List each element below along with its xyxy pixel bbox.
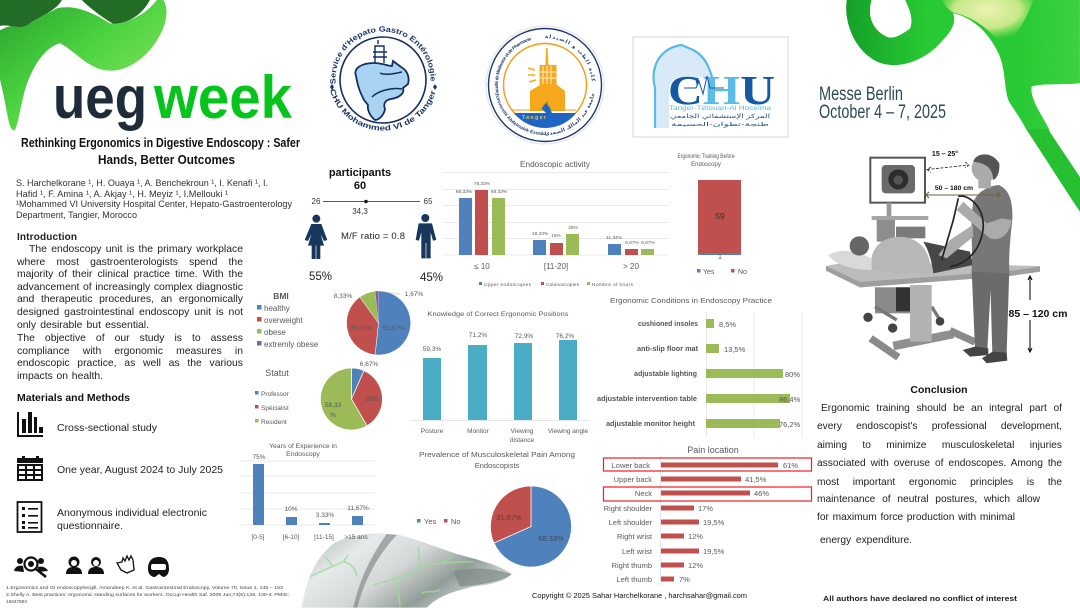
logo: CHU Tanger-Tetouan-Al Hoceima: CHU <box>668 67 775 113</box>
chart: pain location: Right wrist <box>617 532 653 541</box>
chart: BMI pie: BMI <box>273 291 289 301</box>
footer: copyright: Copyright © 2025 Sahar Harchelkorane , harchsahar@gmail.com <box>532 591 747 600</box>
chart: years of experience in endoscopy: 10% <box>284 506 298 513</box>
chart: pain location: Neck <box>635 489 652 498</box>
chart: ergonomic conditions in endoscopy practice: adjustable intervention table <box>597 394 697 403</box>
chart: ergonomic training before endoscopy <box>678 154 747 276</box>
references: 1.Ergonomics and GI endoscopyhergill, Amandeep K. et al. Gastrointestinal Endoscopy, Volume 70, Issue 1, 145 – 153 <box>6 585 283 590</box>
text: questionnaire: Anonymous individual electronic <box>57 507 207 519</box>
chart: BMI pie: 1,67% <box>405 291 423 298</box>
text block: introduction: and therapeutic procedures, an ergonomically <box>17 294 243 305</box>
chart: ergonomic conditions in endoscopy practice: 86,4% <box>779 395 801 404</box>
text block: conclusion: maintenance of neutral postures, which allow <box>817 494 1040 505</box>
decoration: green organ top right <box>846 0 1080 212</box>
participants summary <box>305 167 443 284</box>
chart: endoscopic activity: 11,34% <box>606 235 623 241</box>
chart: statut pie: 6,67% <box>360 361 378 368</box>
logo: ueg week: week <box>153 64 293 131</box>
authors and affiliation: Hafid ¹, F. Amina ¹, A. Akjay ¹, H. Meyiz ¹, I.Mellouki ¹ <box>16 189 228 200</box>
text: questionnaire: questionnaire. <box>57 520 123 532</box>
chart: statut pie: Statut <box>265 368 289 378</box>
text: venue and date: Messe Berlin <box>819 84 903 105</box>
heading: conclusion: Conclusion <box>910 384 968 396</box>
text block: conclusion: associated with overuse of endoscopes. Among the <box>817 458 1062 469</box>
logo: faculte de medecine tanger <box>485 25 605 145</box>
chart: endoscopic activity: Endoscopic activity <box>520 160 590 169</box>
chart: pain location: Lower back <box>612 461 650 470</box>
chart: ergonomic training before endoscopy: Yes <box>703 269 715 276</box>
authors and affiliation: Department, Tangier, Morocco <box>16 210 137 221</box>
decoration: liver illustration <box>302 533 512 608</box>
chart: knowledge of correct ergonomic positions: Knowledge of Correct Ergonomic Positions <box>428 311 569 318</box>
chart: statut pie: 35% <box>365 396 379 403</box>
title <box>21 136 300 167</box>
highlight: lower back <box>604 458 812 471</box>
references: 2.Shelly A. Best practices: ergonomic standing surfaces for workers. Occup Health Saf. 2005 Jun;74(6):128, 130-4. PMID: <box>6 592 289 597</box>
text block: introduction: only desirable but essential. <box>17 320 149 331</box>
heading: introduction: Introduction <box>17 232 77 243</box>
chart: years of experience in endoscopy: Endoscopy <box>286 451 320 458</box>
chart: knowledge of correct ergonomic positions: distance <box>510 437 534 444</box>
chart: ergonomic conditions in endoscopy practice: 8,5% <box>719 320 736 329</box>
text: venue and date <box>819 84 946 123</box>
chart: endoscopic activity <box>443 160 668 288</box>
participants summary: M/F ratio = 0.8 <box>341 231 405 242</box>
chart: years of experience in endoscopy: [11-15] <box>314 534 334 541</box>
chart: ergonomic training before endoscopy: No <box>738 269 747 276</box>
chart: years of experience in endoscopy: [0-5] <box>251 534 265 541</box>
logo: service hepato gastro enterologie: CHU Mohammed VI de Tanger <box>330 89 435 131</box>
text block: introduction: The endoscopy unit is the primary workplace <box>29 244 243 255</box>
logo: faculte de medecine tanger: كلية الطب و الصيدلة <box>545 34 596 81</box>
chart: pain location: Left wrist <box>622 547 653 556</box>
text: questionnaire <box>57 507 207 532</box>
chart: ergonomic conditions in endoscopy practice: anti-slip floor mat <box>637 344 699 353</box>
chart: pain location: 61% <box>783 461 798 470</box>
logo: ueg week <box>53 64 293 131</box>
chart: ergonomic conditions in endoscopy practice: adjustable lighting <box>634 369 697 378</box>
chart: endoscopic activity: [11-20] <box>544 262 568 271</box>
text block: introduction: majority of their clinical practice time. With the <box>17 269 243 280</box>
logo: CHU Tanger-Tetouan-Al Hoceima: Tanger-Tétouan-Al Hoceima <box>669 106 772 112</box>
references <box>6 585 289 604</box>
chart: endoscopic activity: 68,33% <box>456 189 473 195</box>
chart: endoscopic activity: 78,33% <box>474 181 491 187</box>
chart: endoscopic activity: ≤ 10 <box>474 262 490 271</box>
illustration: endoscopist ergonomic setup: 15 – 25° <box>932 150 958 158</box>
chart: endoscopic activity: Nombre of hours <box>592 282 634 288</box>
chart: prevalence of musculoskeletal pain: Prevalence of Musculoskeletal Pain Among <box>419 450 575 459</box>
icon: calendar <box>17 456 43 481</box>
chart: BMI pie: healthy <box>264 304 290 313</box>
chart: knowledge of correct ergonomic positions: Viewing angle <box>548 428 589 435</box>
text block: introduction: impacts on health. <box>17 371 103 382</box>
references: 16047983 <box>6 599 27 604</box>
chart: knowledge of correct ergonomic positions: 72,9% <box>515 333 533 340</box>
chart: years of experience in endoscopy <box>240 443 375 541</box>
text block: introduction: endoscopic practice, as well as the various <box>17 358 243 369</box>
logo: service hepato gastro enterologie: Service d'Hepato Gastro Entérologie <box>330 26 436 84</box>
endoscope <box>942 196 983 267</box>
text block: conclusion: aiming to minimize musculoskeletal injuries <box>817 440 1062 451</box>
doctor <box>938 154 1012 363</box>
arrow: viewing distance <box>926 192 1000 198</box>
chart: endoscopic activity: Colonoscopies <box>546 282 580 288</box>
icon row: people, doctors, glove, goggles <box>14 556 169 577</box>
text block: conclusion: for maximum force production with minimal <box>817 512 1015 523</box>
decoration: green organ top left <box>0 0 167 130</box>
heading: materials and methods: Materials and Methods <box>17 392 130 404</box>
chart: statut pie: Spécialist <box>261 405 289 412</box>
chart: BMI pie: obese <box>264 328 286 337</box>
text block: introduction: where most gastroenterologists spend the <box>17 257 243 268</box>
text block: introduction: The objective of our study is to assess <box>17 333 243 344</box>
chart: BMI pie: extremly obese <box>264 340 319 349</box>
chart: endoscopic activity: Upper endoscopies <box>484 282 532 288</box>
chart: endoscopic activity: 25% <box>568 225 579 231</box>
chart: prevalence of musculoskeletal pain: Endoscopists <box>475 461 520 470</box>
logo: service hepato gastro enterologie <box>330 26 437 131</box>
chart: prevalence of musculoskeletal pain <box>417 450 575 567</box>
text block: conclusion: most important ergonomic principles is the <box>817 477 1062 488</box>
chart: pain location: 17% <box>698 504 713 513</box>
illustration: endoscopist ergonomic setup: 50 – 180 cm <box>935 185 973 192</box>
text block: conclusion: every endoscopist's professional development, <box>817 421 1062 432</box>
chart: pain location <box>604 445 812 586</box>
chart: knowledge of correct ergonomic positions: Monitor <box>467 428 490 435</box>
monitor <box>870 158 925 217</box>
participants summary: 65 <box>424 197 433 206</box>
participants summary: 26 <box>312 197 321 206</box>
icon: male figure <box>416 214 436 258</box>
chart: endoscopic activity: 68,33% <box>491 189 508 195</box>
chart: pain location: 46% <box>754 489 769 498</box>
chart: pain location: 19,5% <box>703 547 725 556</box>
chart: knowledge of correct ergonomic positions: Viewing <box>511 428 534 435</box>
chart: knowledge of correct ergonomic positions: 76,2% <box>556 333 574 340</box>
authors and affiliation: ¹Mohammed VI University Hospital Center, Hepato-Gastroenterology <box>16 199 292 210</box>
chart: ergonomic conditions in endoscopy practice: 13,5% <box>724 345 746 354</box>
chart: prevalence of musculoskeletal pain: Yes <box>424 517 436 526</box>
chart: ergonomic training before endoscopy: 59 <box>715 211 725 221</box>
chart: statut pie: 58,33 <box>325 402 342 409</box>
logo: CHU Tanger-Tetouan-Al Hoceima: المركز الإستشفائي الجامعي <box>670 113 771 120</box>
logo: faculte de medecine tanger: Tanger <box>522 115 546 121</box>
logo: faculte de medecine tanger: Université Abdelmalek Essaâdi <box>496 96 546 135</box>
text: venue and date: October 4 – 7, 2025 <box>819 102 946 123</box>
chart: BMI pie: 51,67% <box>383 325 405 332</box>
chart: pain location: 12% <box>688 561 703 570</box>
chart: pain location: Upper back <box>614 475 652 484</box>
chart: endoscopic activity: > 20 <box>623 262 639 271</box>
chart: pain location: 7% <box>679 575 690 584</box>
logo: faculte de medecine tanger: Faculté de Médecine et de Pharmacie <box>494 38 531 96</box>
chart: ergonomic training before endoscopy: 1 <box>718 254 722 261</box>
chart: years of experience in endoscopy: 3.33% <box>316 512 334 519</box>
chart: endoscopic activity: 18,33% <box>532 231 549 237</box>
table <box>826 262 1040 357</box>
logo: faculte de medecine tanger: جامعة عبد المالك السعدي <box>546 94 595 136</box>
arrow: viewing angle <box>927 162 969 172</box>
highlight: neck <box>604 487 812 501</box>
authors and affiliation: S. Harchelkorane ¹, H. Ouaya ¹, A. Benchekroun ¹, I. Kenafi ¹, I. <box>16 178 268 189</box>
chart: BMI pie: 8,33% <box>334 293 352 300</box>
chart: ergonomic training before endoscopy: Ergonomic Training Before <box>678 154 735 160</box>
icon: checklist <box>18 502 42 532</box>
chart: years of experience in endoscopy: Years of Experience in <box>269 443 337 450</box>
cart <box>872 216 928 242</box>
chart: years of experience in endoscopy: 75% <box>252 454 266 461</box>
text block: introduction: advancement of increasingly complex diagnostic <box>17 282 243 293</box>
chart: BMI pie: 38,33% <box>350 325 372 332</box>
chart: ergonomic conditions in endoscopy practice <box>597 298 802 437</box>
chart: pain location: Right thumb <box>612 561 652 570</box>
icon: bar chart <box>17 412 43 437</box>
chart: endoscopic activity: 15% <box>551 233 562 239</box>
chart: ergonomic conditions in endoscopy practice: adjustable monitor height <box>606 419 696 428</box>
footer: conflict of interest: All authors have declared no conflict of interest <box>823 594 1018 603</box>
chart: knowledge of correct ergonomic positions: 71,2% <box>469 332 487 339</box>
chart: ergonomic conditions in endoscopy practice: 76,2% <box>779 420 801 429</box>
illustration: endoscopist ergonomic setup: 85 – 120 cm <box>1009 308 1067 320</box>
chart: pain location: Pain location <box>687 445 739 455</box>
chart: ergonomic conditions in endoscopy practice: cushioned insoles <box>638 319 698 328</box>
chart: prevalence of musculoskeletal pain: 68,33% <box>538 534 564 543</box>
text block: introduction: designed gastrointestinal endoscopy unit is not <box>17 307 243 318</box>
logo: CHU Tanger-Tetouan-Al Hoceima: طنجة-تطوان-الحسيمة <box>671 122 769 128</box>
title: Rethinking Ergonomics in Digestive Endoscopy : Safer <box>21 136 300 150</box>
chart: statut pie: Resident <box>261 419 287 426</box>
participants summary: 55% <box>309 271 332 283</box>
text block: conclusion: energy expenditure. <box>820 535 912 546</box>
patient <box>828 236 973 274</box>
chart: pain location: Left thumb <box>617 575 652 584</box>
participants summary: 60 <box>354 180 366 192</box>
chart: BMI pie <box>257 291 423 355</box>
authors and affiliation <box>16 178 292 221</box>
chart: knowledge of correct ergonomic positions <box>410 311 590 444</box>
chart: prevalence of musculoskeletal pain: No <box>451 517 461 526</box>
chart: pain location: 41,5% <box>745 475 767 484</box>
chart: statut pie <box>255 361 382 430</box>
chart: years of experience in endoscopy: >15 ans <box>344 534 368 541</box>
text: study period: One year, August 2024 to July 2025 <box>57 464 223 476</box>
chart: statut pie: % <box>330 412 336 419</box>
chart: prevalence of musculoskeletal pain: 31,67% <box>496 513 522 522</box>
chart: ergonomic training before endoscopy: Endoscopy <box>691 162 721 168</box>
chart: endoscopic activity: 6,67% <box>641 240 656 246</box>
participants summary: participants <box>329 167 391 179</box>
chart: knowledge of correct ergonomic positions: Posture <box>421 428 444 435</box>
text block: introduction: compliance with ergonomic measures in <box>17 346 243 357</box>
title: Hands, Better Outcomes <box>98 153 235 167</box>
chart: ergonomic conditions in endoscopy practice: 80% <box>785 370 800 379</box>
chart: years of experience in endoscopy: 11,67% <box>347 505 369 512</box>
chart: knowledge of correct ergonomic positions: 59,3% <box>423 346 441 353</box>
chart: statut pie: Professor <box>261 391 290 398</box>
participants summary: 45% <box>420 272 443 284</box>
participants summary: 34,3 <box>352 207 368 216</box>
logo: ueg week: ueg <box>53 64 147 131</box>
text: study design: Cross-sectional study <box>57 422 158 434</box>
chart: years of experience in endoscopy: [6-10] <box>283 534 300 541</box>
chart: BMI pie: overweight <box>264 316 303 325</box>
chart: pain location: Left shoulder <box>609 518 652 527</box>
chart: endoscopic activity: 6,67% <box>625 240 640 246</box>
chart: ergonomic conditions in endoscopy practice: Ergonomic Conditions in Endoscopy Practice <box>610 298 772 305</box>
logo: CHU Tanger-Tetouan-Al Hoceima <box>633 37 788 137</box>
text block: conclusion <box>817 400 1064 550</box>
arrow: table height <box>1028 276 1032 352</box>
chart: pain location: Right shoulder <box>604 504 652 513</box>
text block: introduction <box>17 240 245 386</box>
icon: female figure <box>305 215 327 259</box>
text block: conclusion: Ergonomic training should be an integral part of <box>821 403 1062 414</box>
chart: pain location: 19,5% <box>703 518 725 527</box>
chart: pain location: 12% <box>688 532 703 541</box>
illustration: endoscopist ergonomic setup <box>826 150 1067 363</box>
